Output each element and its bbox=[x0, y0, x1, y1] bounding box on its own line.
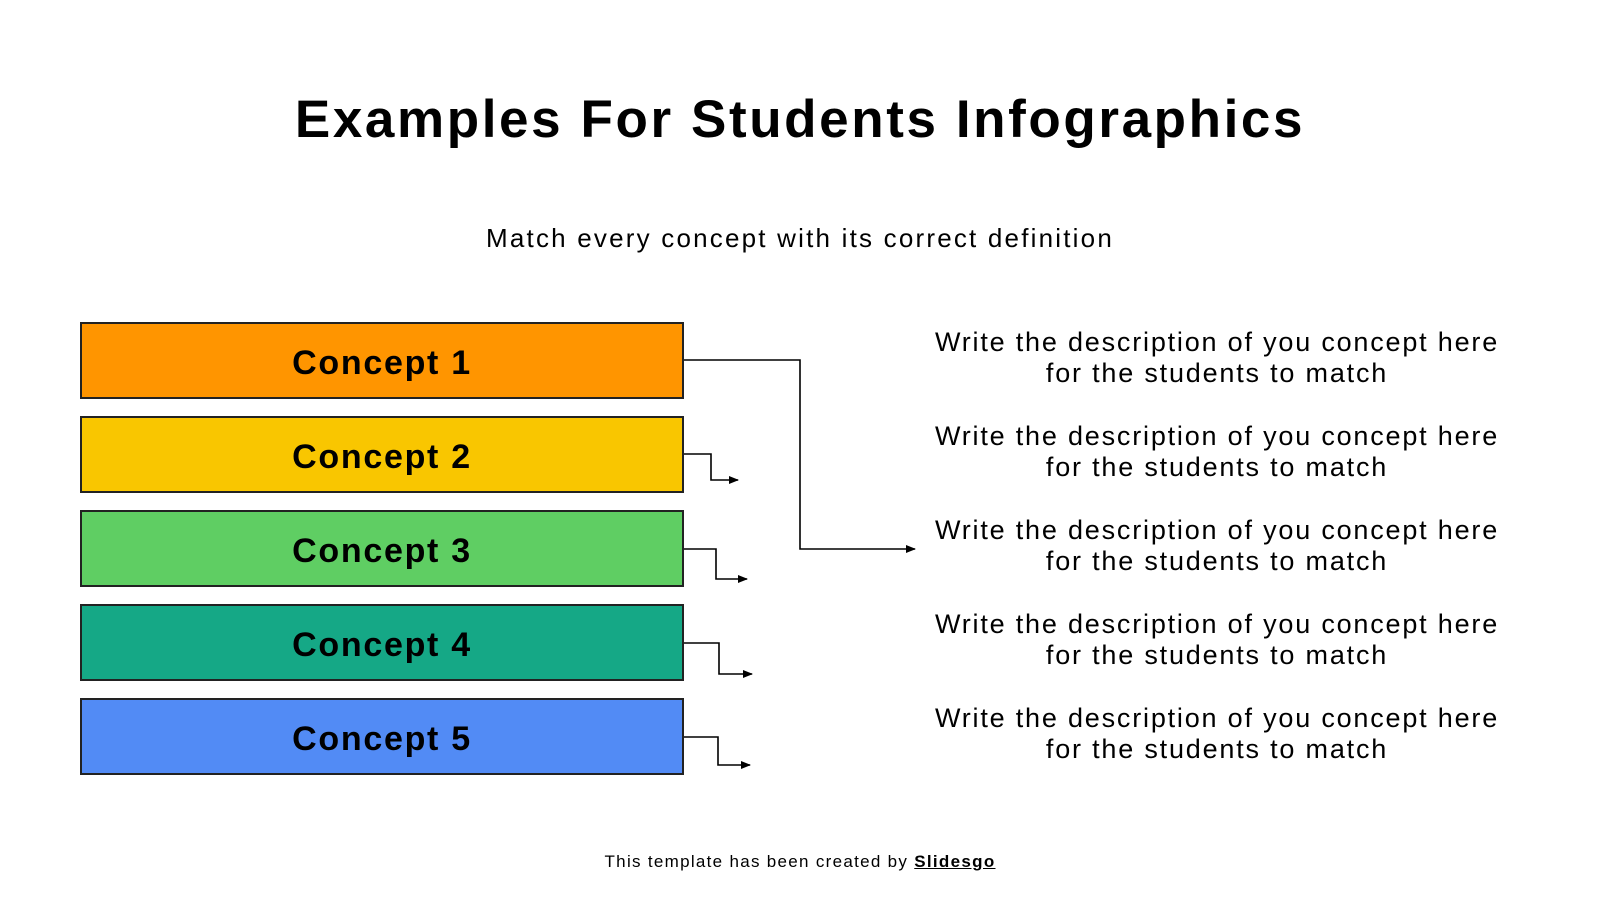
concept box 4 bbox=[80, 604, 684, 681]
concept box 4: Concept 4 bbox=[292, 626, 472, 664]
arrow: concept 1 bbox=[684, 360, 915, 549]
description 1 bbox=[935, 327, 1499, 388]
concept box 2: Concept 2 bbox=[292, 438, 472, 476]
arrow: concept 3 bbox=[684, 549, 747, 579]
subtitle: Match every concept with its correct definition bbox=[486, 223, 1114, 253]
description 1: Write the description of you concept here bbox=[935, 327, 1499, 357]
concept box 3 bbox=[80, 510, 684, 587]
concept box 3: Concept 3 bbox=[292, 532, 472, 570]
description 4 bbox=[935, 609, 1499, 670]
description 4: for the students to match bbox=[1046, 640, 1388, 670]
title: Examples For Students Infographics bbox=[295, 90, 1305, 149]
description 2: Write the description of you concept here bbox=[935, 421, 1499, 451]
description 1: for the students to match bbox=[1046, 358, 1388, 388]
description 3 bbox=[935, 515, 1499, 576]
concept box 2 bbox=[80, 416, 684, 493]
concept box 5: Concept 5 bbox=[292, 720, 472, 758]
concept box 1 bbox=[80, 322, 684, 399]
arrow: concept 5 bbox=[684, 737, 750, 765]
concept box 1: Concept 1 bbox=[292, 344, 472, 382]
concept box 5 bbox=[80, 698, 684, 775]
description 4: Write the description of you concept here bbox=[935, 609, 1499, 639]
description 2 bbox=[935, 421, 1499, 482]
description 5: Write the description of you concept here bbox=[935, 703, 1499, 733]
arrow: concept 4 bbox=[684, 643, 752, 674]
description 3: Write the description of you concept here bbox=[935, 515, 1499, 545]
description 5: for the students to match bbox=[1046, 734, 1388, 764]
description 3: for the students to match bbox=[1046, 546, 1388, 576]
description 5 bbox=[935, 703, 1499, 764]
description 2: for the students to match bbox=[1046, 452, 1388, 482]
arrow: concept 2 bbox=[684, 454, 738, 480]
footer credit: This template has been created by Slidesgo bbox=[604, 852, 996, 871]
